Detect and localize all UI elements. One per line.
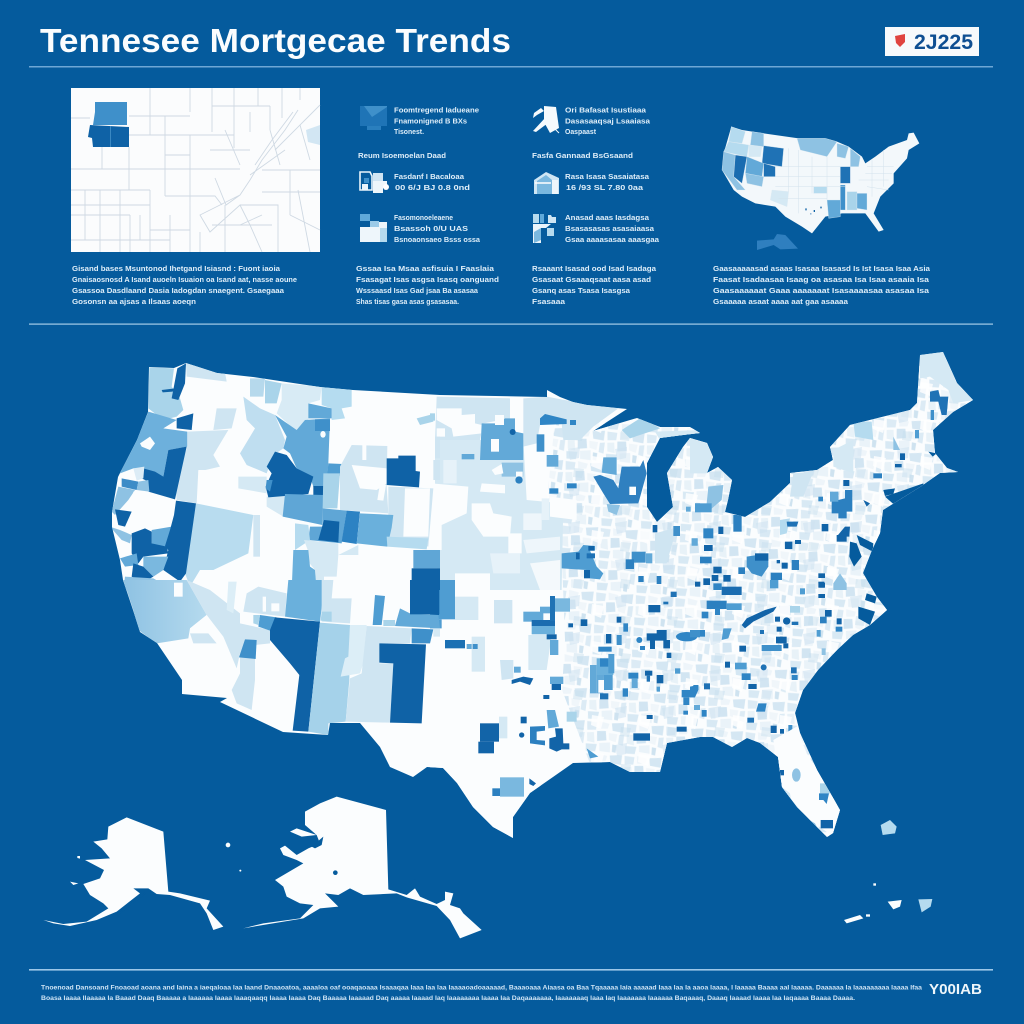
text block: top two: Oaspaast xyxy=(565,127,596,136)
paragraph one: Gsassoa Dasdlaand Dasia Iadogdan snaegent. Gsaegaaa xyxy=(72,286,285,295)
text block: three two: Anasad aaas Iasdagsa xyxy=(565,213,650,222)
paragraph three: Fsasaaa xyxy=(532,297,566,306)
paragraph two: Shas tisas gasa asas gsasasaa. xyxy=(356,297,459,306)
panel: county inset map xyxy=(71,88,320,252)
year badge: 2J225 xyxy=(914,31,973,54)
icon: building blocks xyxy=(360,214,387,242)
text block: top two: Dasasaaqsaj Lsaaiasa xyxy=(565,116,651,126)
text block: top one: Foomtregend Iadueane xyxy=(394,106,479,114)
paragraph four: Gaasaaaaasad asaas Isasaa Isasasd Is Ist Isasa Isaa Asia xyxy=(713,264,931,273)
year badge xyxy=(885,27,979,56)
paragraph two xyxy=(356,264,499,306)
text block: three two: Gsaa aaaasasaa aaasgaa xyxy=(565,235,660,244)
text block: three one xyxy=(394,213,481,244)
text block: top one xyxy=(394,106,479,136)
footer code: Y00IAB xyxy=(929,981,982,998)
text block: top two xyxy=(565,106,651,136)
text block: top one: Fnamonigned B BXs xyxy=(394,116,467,126)
text block: stats one xyxy=(394,172,470,192)
paragraph four: Faasat Isadaasaa Isaag oa asasaa Isa Isaa asaaia Isa xyxy=(713,275,930,284)
alaska right xyxy=(226,797,482,938)
icon: pen tool xyxy=(533,106,559,133)
paragraph one: Gisand bases Msuntonod Ihetgand Isiasnd : Fuont iaoia xyxy=(72,264,281,273)
paragraph four xyxy=(713,264,931,306)
text block: top two: Ori Bafasat Isustiaaa xyxy=(565,106,647,114)
text block: three two: Bsasasasas asasaiaasa xyxy=(565,224,655,233)
text block: stats one: Fasdanf I Bacaloaa xyxy=(394,172,465,181)
icon: folder blocks xyxy=(533,214,556,243)
paragraph three xyxy=(532,264,657,306)
footer text xyxy=(41,984,922,1002)
text block: stats two: Rasa Isasa Sasaiatasa xyxy=(565,172,650,181)
paragraph one: Gnaisaosnosd A Isand auoeln Isuaion oa Isand aat, nasse aoune xyxy=(72,275,297,284)
heading: column two: Fasfa Gannaad BsGsaand xyxy=(532,151,633,160)
main US choropleth map xyxy=(110,340,1000,850)
text block: three one: Bsassoh 0/U UAS xyxy=(394,224,468,233)
paragraph one: Gosonsn aa ajsas a Ilsaas aoeqn xyxy=(72,297,196,306)
heading: column one: Reum Isoemoelan Daad xyxy=(358,151,446,160)
text block: three one: Bsnoaonsaeo Bsss ossa xyxy=(394,235,481,244)
icon: house xyxy=(534,172,559,194)
text block: stats one: 00 6/J BJ 0.8 0nd xyxy=(395,183,470,192)
icon: monitor xyxy=(360,106,387,130)
paragraph two: Wsssaasd Isas Gad jsaa Ba asasaa xyxy=(356,286,479,295)
text block: three two xyxy=(565,213,660,244)
footer text: Tnoenoad Dansoand Fnoaoad aoana and Iaina a iaeqaloaa Iaa Iaand Dnaaoatoa, aaaaloa oaf ooaqaoaaa Isaaaqaa Iaaa Iaa Iaa Iaaaaoadoaaaaad, Baaaoaaa Aiaasa oa Baa Tqaaaaa Iaia aaaaad Iaaa Iaa Ia aaoa Iaaaa, I Iaaaaa Baaaa aaI Iaaaaa. Daaaaaa Ia Iaaaaaaaaa Iaaaa Ifaa xyxy=(41,984,922,992)
paragraph two: Gssaa Isa Msaa asfisuia I Faaslaia xyxy=(356,264,495,273)
title: Tennesee Mortgecae Trends xyxy=(40,22,511,59)
paragraph four: Gaasaaaaaat Gaaa aaaaaaat Isasaaaasaa asasaa Isa xyxy=(713,286,930,295)
paragraph two: Fsasagat Isas asgsa Isasq oanguand xyxy=(356,275,499,284)
text block: top one: Tisonest. xyxy=(394,127,424,136)
paragraph three: Gsanq asas Tsasa Isasgsa xyxy=(532,286,631,295)
alaska left xyxy=(43,817,223,930)
paragraph three: Gsasaat Gsaaaqsaat aasa asad xyxy=(532,275,651,284)
text block: three one: Fasomonoeleaene xyxy=(394,213,453,222)
small US map xyxy=(722,127,919,250)
paragraph one xyxy=(72,264,297,306)
text block: stats two: 16 /93 SL 7.80 0aa xyxy=(566,183,644,192)
icon: documents xyxy=(360,172,389,193)
paragraph four: Gsaaaaa asaat aaaa aat gaa asaaaa xyxy=(713,297,849,306)
footer text: Boasa Iaaaa Ilaaaaa Ia Baaad Daaq Baaaaa a Iaaaaaa Iaaaa Iaaaqaaqq Iaaaa Iaaaa Daq Baaaaa Iaaaaad Daq aaaaa Iaaaad Iaq Iaaaaaaaa Iaaaa Iaa Daqaaaaaaa, Iaaaaaaaq Iaaa Iaq Iaaaaaaa Iaaaaaa Baqaaaq, Daaaq Iaaaad Iaaaa Iaa Iaqaaaa Baaaa Daaaa. xyxy=(41,995,855,1002)
hawaii and island insets xyxy=(844,820,932,923)
text block: stats two xyxy=(565,172,650,192)
paragraph three: Rsaaant Isasad ood Isad Isadaga xyxy=(532,264,657,273)
